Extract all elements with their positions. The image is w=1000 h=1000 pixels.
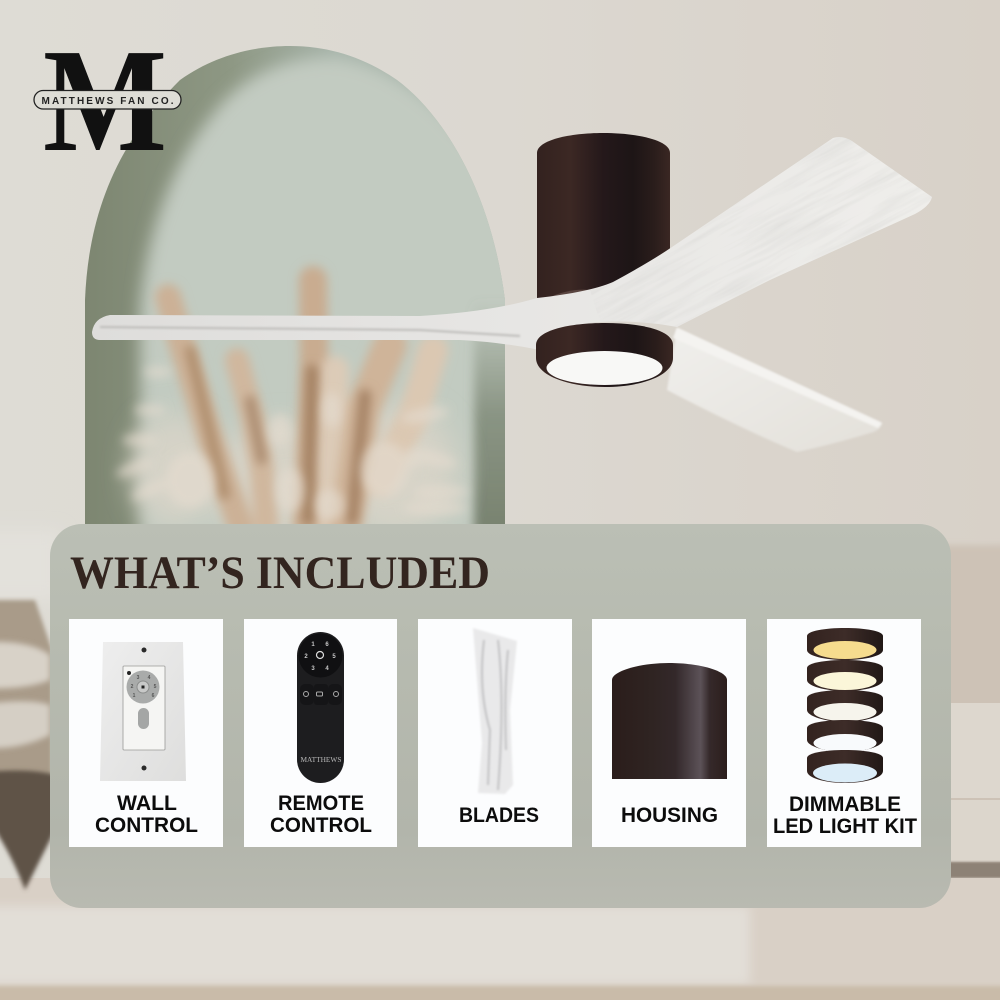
label: [773, 793, 917, 838]
icon: remote: MATTHEWS: [300, 755, 342, 764]
background: cushions and leaf: [0, 530, 60, 890]
icon: remote: 5: [332, 654, 336, 660]
label: REMOTE: [278, 792, 364, 815]
label: [95, 792, 198, 837]
card: remote control: [244, 619, 397, 847]
icon: remote: 1: [311, 642, 315, 648]
label: [270, 792, 372, 837]
icon: remote: [297, 632, 344, 783]
label: CONTROL: [270, 814, 372, 837]
label: WALL: [117, 792, 177, 815]
label: CONTROL: [95, 814, 198, 837]
icon: remote: 6: [325, 642, 329, 648]
icon: wall control plate: 6: [152, 693, 155, 699]
pampas grass: [114, 280, 468, 535]
ceiling fan: [92, 133, 932, 452]
card: wall control: [69, 619, 223, 847]
icon: wall control plate: 5: [154, 684, 157, 690]
arch shaded right edge: [468, 341, 505, 524]
heading: WHAT’S INCLUDED: [70, 547, 490, 599]
fan upper and left blades: [92, 137, 932, 349]
icon: LED colour stack: [807, 628, 883, 783]
label: LED LIGHT KIT: [773, 815, 917, 838]
arch lit interior: [130, 54, 505, 524]
label: HOUSING: [621, 804, 718, 827]
fan lower blade: [667, 328, 882, 452]
icon: remote: 2: [304, 654, 308, 660]
icon: wall control plate: 2: [131, 684, 134, 690]
icon: blade: [473, 628, 517, 794]
background: sage green arch niche: [85, 46, 505, 524]
logo: Matthews Fan Co.: [34, 19, 181, 183]
icon: wall control plate: 3: [137, 675, 140, 681]
icon: wall control plate: 4: [148, 675, 151, 681]
label: DIMMABLE: [789, 793, 901, 816]
icon: housing cylinder: [612, 663, 727, 779]
logo name badge: MATTHEWS FAN CO.: [42, 96, 174, 107]
icon: wall control plate: 1: [133, 693, 136, 699]
fan light ring: [536, 323, 673, 387]
panel: what's included: [50, 524, 951, 908]
card: dimmable LED light kit: [767, 619, 921, 847]
icon: remote: 4: [325, 666, 329, 672]
pampas fluff: [114, 367, 468, 521]
icon: wall control plate: [100, 642, 186, 781]
background: sofa and floor: [0, 545, 1000, 1000]
fan housing: [537, 133, 670, 310]
icon: remote: 3: [311, 666, 315, 672]
label: BLADES: [459, 804, 539, 827]
logo name badge: [34, 90, 181, 109]
card: blades: [418, 619, 572, 847]
card: housing: [592, 619, 746, 847]
logo letter M: M: [43, 19, 167, 183]
